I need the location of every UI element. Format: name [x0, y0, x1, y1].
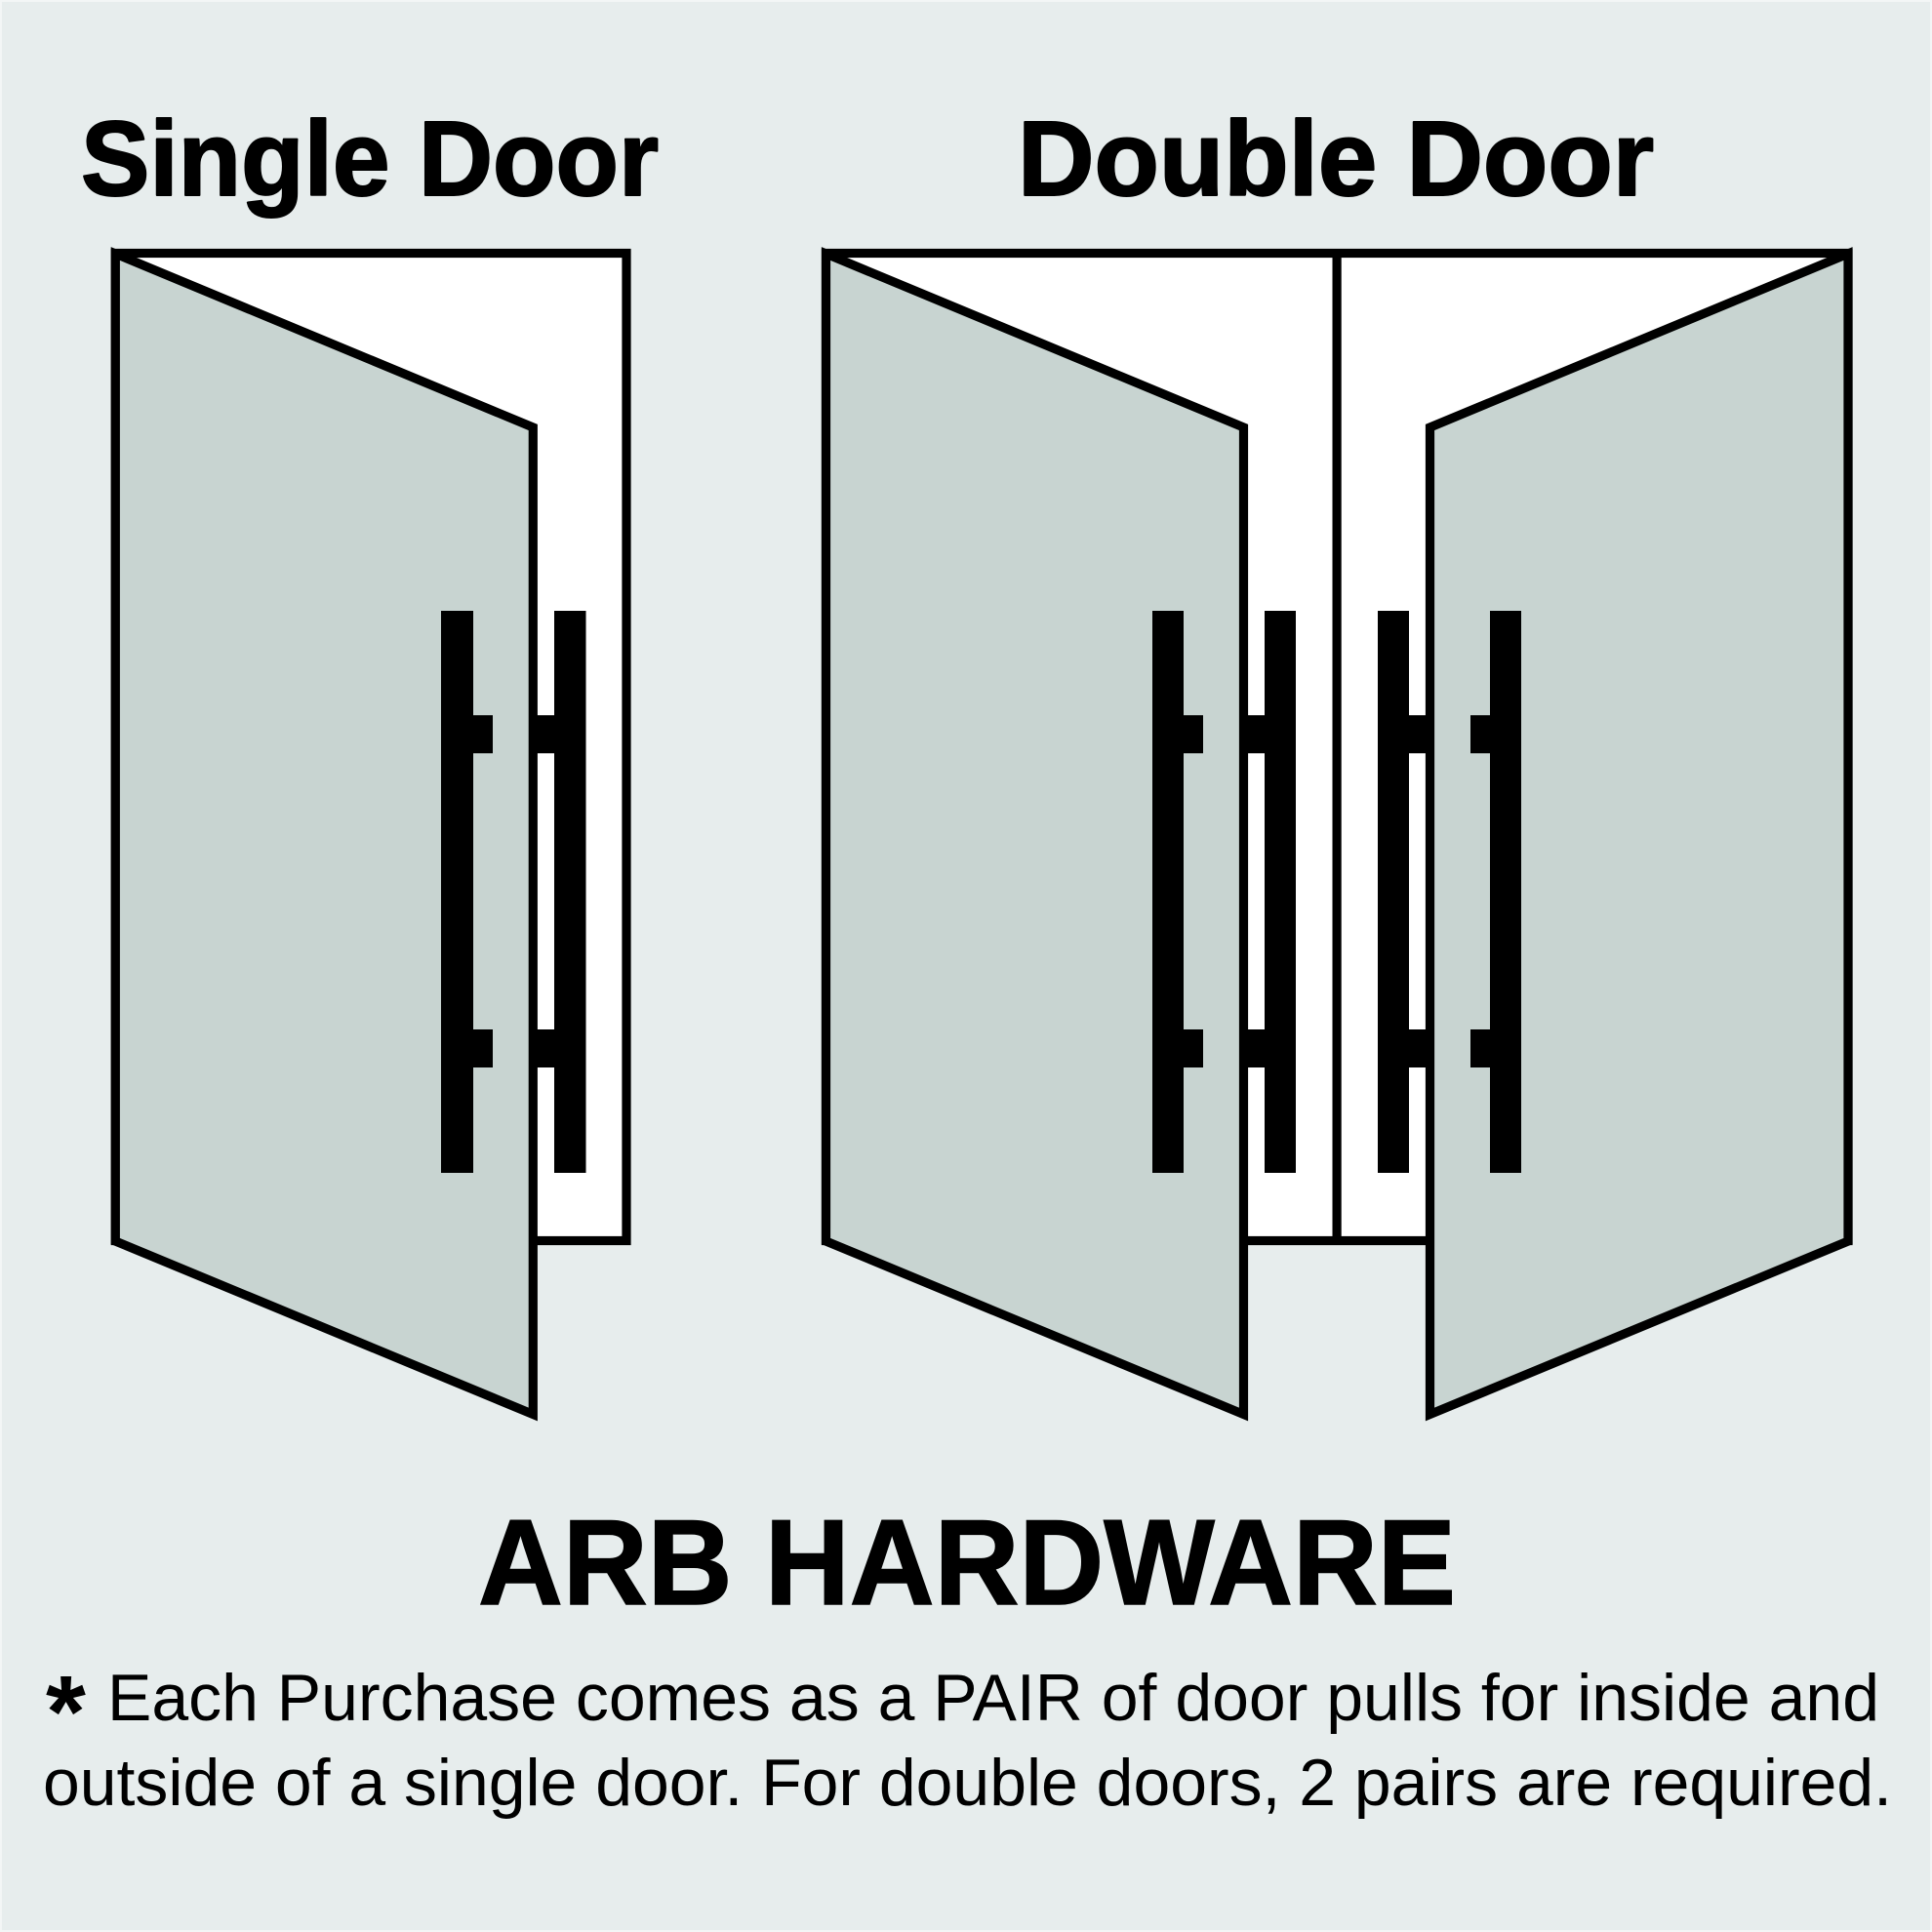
heading: Single Door: Single Door	[81, 100, 659, 219]
door pull: left outside handle	[1152, 611, 1203, 1173]
door pull: left inside handle	[1244, 611, 1296, 1173]
brand title: ARB HARDWARE: ARB HARDWARE	[478, 1496, 1456, 1630]
door pull: right inside handle	[1378, 611, 1429, 1173]
frame center post	[1333, 254, 1342, 1241]
note line 2: outside of a single door. For double doors, 2 pairs are required.	[43, 1746, 1892, 1820]
door frame: double	[825, 254, 1848, 1241]
door frame: single	[115, 254, 626, 1241]
door leaf: left	[825, 254, 1243, 1415]
door pull: outside handle on leaf	[441, 611, 493, 1173]
door leaf: open single door	[115, 254, 533, 1415]
diagram: double door	[825, 254, 1848, 1415]
door pull: right outside handle	[1470, 611, 1521, 1173]
door leaf: right	[1430, 254, 1848, 1415]
icon: asterisk: *	[46, 1655, 86, 1769]
door pull: inside handle seen through frame	[533, 611, 585, 1173]
heading: Double Door: Double Door	[1018, 100, 1654, 219]
note line 1: Each Purchase comes as a PAIR of door pulls for inside and	[107, 1661, 1879, 1735]
note: pair purchase explanation	[43, 1655, 1892, 1820]
diagram: single door	[115, 254, 626, 1415]
